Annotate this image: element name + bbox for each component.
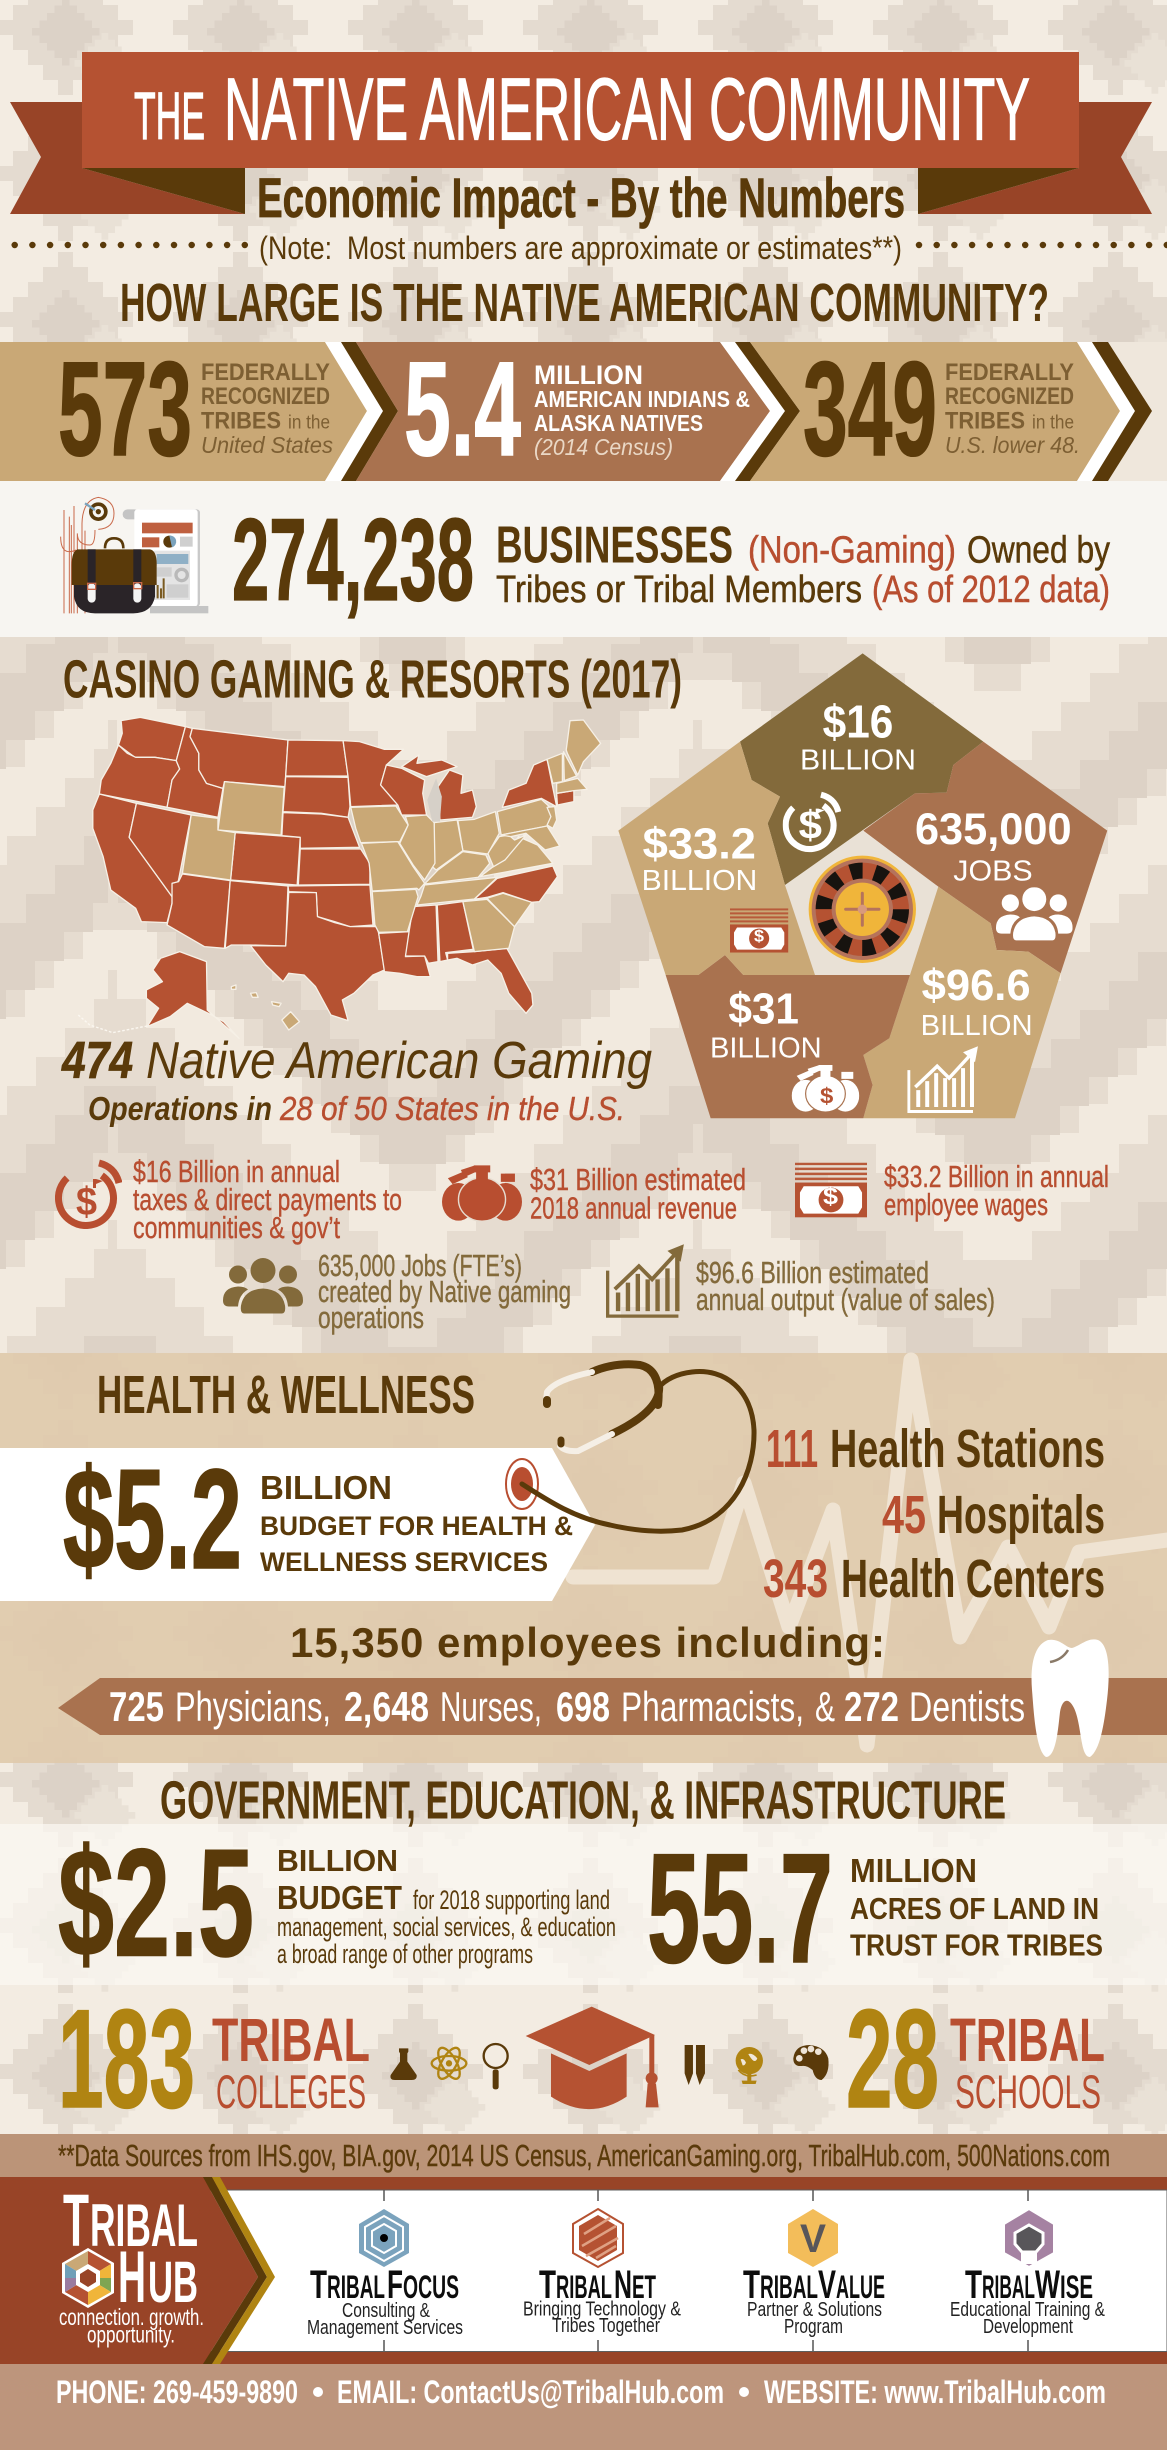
- stat: 55.7 million acres: 55.7: [647, 1822, 833, 1996]
- stat list: health facilities: 111: [766, 1419, 818, 1479]
- stat: 349 tribes: in the: [1032, 413, 1074, 434]
- legend: $96.6 billion: [606, 1244, 995, 1318]
- stat: 5.4 million: (2014 Census): [534, 434, 673, 460]
- icon: blue hexagon: [359, 2209, 409, 2267]
- stat: 55.7 million acres: MILLION: [850, 1852, 977, 1889]
- legend: $31 billion: $31 Billion estimated: [530, 1162, 746, 1197]
- legend: $16 billion: $16 Billion in annual: [133, 1154, 340, 1189]
- stat: 573 tribes: United States: [201, 432, 333, 458]
- stat: businesses: BUSINESSES: [496, 516, 733, 574]
- stat: 5.4 million: [404, 335, 750, 484]
- product: TribalValue: RIBAL: [760, 2269, 818, 2305]
- stat: 573 tribes: TRIBES: [201, 408, 281, 435]
- stat: 183 tribal colleges: COLLEGES: [216, 2065, 366, 2118]
- icon: purple bulb hexagon: [1004, 2209, 1054, 2267]
- legend: 635,000 jobs: created by Native gaming: [318, 1274, 571, 1309]
- legend: $16 billion: communities & gov’t: [133, 1210, 340, 1245]
- stat: 5.4 million: AMERICAN INDIANS &: [534, 386, 750, 412]
- title: THE: [134, 79, 205, 154]
- background: health section: [0, 1353, 1167, 1763]
- product: TribalNet: N: [614, 2263, 632, 2307]
- legend: $33.2 billion: $: [823, 1183, 839, 1210]
- legend: $96.6 billion: annual output (value of sales): [696, 1282, 995, 1317]
- product: TribalNet: Bringing Technology &: [523, 2298, 682, 2320]
- caption: 474 operations: Native American Gaming: [146, 1032, 652, 1090]
- legend: $16 billion: $: [76, 1180, 97, 1224]
- icon: magnifier: [484, 2044, 508, 2089]
- stat: 5.4 million: MILLION: [534, 360, 643, 390]
- stat: 573 tribes: FEDERALLY: [201, 359, 330, 386]
- stat: $2.5 billion budget: BILLION: [277, 1843, 398, 1878]
- panel: health budget: WELLNESS SERVICES: [260, 1547, 548, 1577]
- legend: 635,000 jobs: [223, 1248, 571, 1335]
- logo: Tribal Hub: RIBAL: [90, 2192, 198, 2259]
- icon: red hexagon: [573, 2209, 623, 2267]
- stat: 349 tribes: FEDERALLY: [945, 359, 1074, 386]
- stat: businesses: Owned by: [967, 530, 1110, 572]
- legend: $31 billion: [442, 1162, 746, 1226]
- stat: 55.7 million acres: TRUST FOR TRIBES: [850, 1928, 1103, 1962]
- product: TribalValue: Partner & Solutions: [747, 2299, 882, 2321]
- stat: 5.4 million: 5.4: [404, 335, 521, 484]
- panel: health budget: BILLION: [260, 1469, 392, 1506]
- caption: 474 operations: 474: [61, 1032, 133, 1090]
- arrow band: staff counts: Pharmacists,: [621, 1683, 804, 1730]
- arrow band: staff counts: Dentists: [909, 1683, 1025, 1730]
- product: TribalValue: T: [743, 2263, 760, 2307]
- product: TribalWise: W: [1035, 2263, 1060, 2307]
- panel: health budget: [0, 1440, 595, 1601]
- icon: multicolour hexagon: [62, 2248, 114, 2308]
- stat: 573 tribes: RECOGNIZED: [201, 383, 330, 410]
- product: TribalFocus: OCUS: [403, 2269, 459, 2305]
- stat: 183 tribal colleges: 183: [58, 1980, 195, 2137]
- stat: $96.6 billion: [907, 962, 1033, 1113]
- product: TribalWise: Educational Training &: [950, 2299, 1106, 2321]
- stat: 55.7 million acres: [647, 1822, 1103, 1996]
- icon: stethoscope: [506, 1364, 754, 1531]
- arrow band: staff counts: &: [815, 1683, 835, 1730]
- caption: 474 operations: [61, 1032, 652, 1127]
- stat: 55.7 million acres: ACRES OF LAND IN: [850, 1891, 1099, 1926]
- icon: tooth: [1032, 1639, 1109, 1757]
- stat: businesses: [232, 494, 1110, 625]
- stat: 28 tribal schools: [846, 1980, 1105, 2137]
- stat list: health facilities: 343: [763, 1549, 828, 1609]
- stat: $31 billion: $: [820, 1083, 833, 1108]
- footer: contact details: PHONE: 269-459-9890: [56, 2374, 298, 2410]
- caption: 474 operations: 28 of 50 States in the U.S.: [279, 1090, 625, 1127]
- stat: $31 billion: BILLION: [710, 1032, 822, 1064]
- stat: $2.5 billion budget: for 2018 supporting land: [413, 1885, 610, 1915]
- legend: $33.2 billion: employee wages: [884, 1187, 1048, 1222]
- product: TribalFocus: T: [310, 2263, 327, 2307]
- product: TribalValue: V: [818, 2263, 836, 2307]
- stat: businesses: Tribes or Tribal Members: [496, 569, 862, 611]
- arrow band: staff counts: 725: [109, 1683, 164, 1730]
- stat: businesses: (Non-Gaming): [748, 530, 956, 572]
- stat: 573 tribes: 573: [58, 335, 192, 484]
- stat: 28 tribal schools: 28: [846, 1980, 939, 2137]
- arrow band: staff counts: 698: [556, 1683, 610, 1730]
- stat: businesses: 274,238: [232, 494, 474, 625]
- note with dotted rules: (Note: Most numbers are approximate or estimates**): [259, 230, 902, 266]
- stat: $33.2 billion: [642, 820, 788, 953]
- map: United States: [78, 717, 601, 1038]
- icon: pencils: [685, 2045, 705, 2085]
- product: TribalFocus: Consulting &: [342, 2300, 431, 2322]
- icon: briefcase and report: [61, 497, 208, 613]
- heading: health and wellness: HEALTH & WELLNESS: [97, 1365, 475, 1425]
- stat: $33.2 billion: $33.2: [643, 820, 756, 868]
- stat: $2.5 billion budget: [58, 1818, 616, 1988]
- stat: 349 tribes: TRIBES: [945, 408, 1025, 435]
- product: TribalNet: T: [539, 2263, 556, 2307]
- stat: 183 tribal colleges: TRIBAL: [212, 2006, 370, 2074]
- legend: $96.6 billion: $96.6 Billion estimated: [696, 1255, 929, 1290]
- graphic: ECG line: [573, 1360, 1167, 1745]
- footer: contact details: EMAIL: ContactUs@TribalHub.com: [337, 2374, 724, 2410]
- ribbon banner: [10, 52, 1152, 214]
- logo: Tribal Hub: H: [118, 2237, 146, 2318]
- legend: $16 billion: [48, 1154, 402, 1245]
- stat: $31 billion: [710, 985, 859, 1112]
- icon: roulette wheel: [809, 856, 916, 963]
- background: casino section pattern: [0, 637, 1167, 1353]
- stat: $16 billion: $: [799, 803, 822, 847]
- stat: $2.5 billion budget: management, social services, & education: [277, 1912, 616, 1942]
- background: government section: [0, 1763, 1167, 2134]
- stat: 349 tribes: RECOGNIZED: [945, 383, 1074, 410]
- icon: atom: [432, 2045, 466, 2082]
- icon: palette: [793, 2045, 829, 2080]
- stat: $2.5 billion budget: $2.5: [58, 1818, 254, 1988]
- stat: $2.5 billion budget: a broad range of other programs: [277, 1939, 533, 1969]
- product: TribalWise: RIBAL: [982, 2269, 1035, 2305]
- stat: 28 tribal schools: TRIBAL: [950, 2006, 1105, 2074]
- stat: 349 tribes: U.S. lower 48.: [945, 432, 1080, 458]
- panel: health budget: $5.2: [63, 1440, 242, 1599]
- product: TribalNet: RIBAL: [556, 2269, 612, 2305]
- footer: contact details: [0, 2364, 1167, 2450]
- product: TribalValue: Program: [784, 2316, 843, 2338]
- product: TribalNet: Tribes Together: [552, 2315, 660, 2337]
- product: TribalNet: ET: [632, 2269, 656, 2305]
- product: TribalNet: [523, 2209, 682, 2337]
- caption: 474 operations: Operations in: [88, 1090, 272, 1127]
- panel: pentagon of gaming stats: [618, 653, 1107, 1118]
- legend: 635,000 jobs: operations: [318, 1300, 424, 1335]
- product: TribalWise: [950, 2209, 1106, 2338]
- logo: Tribal Hub: connection. growth.: [59, 2304, 204, 2330]
- icon: flask: [390, 2048, 417, 2080]
- product: TribalFocus: [307, 2209, 463, 2339]
- legend: $31 billion: 2018 annual revenue: [530, 1190, 737, 1226]
- product: TribalValue: [743, 2209, 885, 2338]
- logo: Tribal Hub: [59, 2179, 204, 2348]
- arrow band: staff counts: [58, 1678, 1167, 1735]
- stat list: health facilities: 45: [882, 1485, 926, 1545]
- stat: $33.2 billion: $: [754, 927, 765, 946]
- product: TribalWise: Development: [983, 2316, 1073, 2338]
- logo: Tribal Hub: T: [63, 2179, 89, 2262]
- stat: $96.6 billion: $96.6: [922, 962, 1031, 1010]
- stat: $96.6 billion: BILLION: [921, 1010, 1033, 1042]
- icon: graduation cap: [526, 2007, 659, 2109]
- legend: 635,000 jobs: 635,000 Jobs (FTE’s): [318, 1248, 522, 1283]
- stat: 635,000 jobs: 635,000: [915, 805, 1072, 854]
- logo: Tribal Hub: opportunity.: [87, 2322, 175, 2348]
- icon: gold hexagon: [788, 2209, 838, 2267]
- arrow band: staff counts: Nurses,: [440, 1683, 542, 1730]
- stat: $31 billion: $31: [728, 985, 799, 1033]
- stat: $2.5 billion budget: BUDGET: [277, 1879, 402, 1916]
- arrow band: staff counts: Physicians,: [175, 1683, 331, 1730]
- stat: $16 billion: BILLION: [800, 744, 916, 776]
- heading: casino gaming: CASINO GAMING & RESORTS (2017): [63, 650, 682, 710]
- icon: globe: [736, 2047, 763, 2084]
- stat list: health facilities: [763, 1419, 1105, 1609]
- panel: health budget: BUDGET FOR HEALTH &: [260, 1511, 573, 1541]
- text: employees: 15,350 employees including:: [290, 1619, 885, 1666]
- product: TribalWise: T: [965, 2263, 982, 2307]
- product: TribalFocus: F: [387, 2263, 403, 2307]
- stat: 5.4 million: ALASKA NATIVES: [534, 410, 703, 436]
- panel: company strip: [0, 2177, 1167, 2364]
- product: TribalValue: ALUE: [836, 2269, 885, 2305]
- product: TribalWise: ISE: [1060, 2269, 1093, 2305]
- stat: 573 tribes: in the: [288, 413, 330, 434]
- legend: $16 billion: taxes & direct payments to: [133, 1182, 402, 1217]
- background: woven pattern top: [0, 0, 1167, 342]
- icon: gold hexagon: V: [800, 2217, 826, 2261]
- arrow band: staff counts: 2,648: [344, 1683, 429, 1730]
- product: TribalFocus: Management Services: [307, 2317, 463, 2339]
- product: TribalFocus: RIBAL: [327, 2269, 385, 2305]
- logo: Tribal Hub: UB: [148, 2250, 198, 2315]
- stat: 635,000 jobs: JOBS: [953, 856, 1033, 888]
- panel: businesses: [0, 481, 1167, 637]
- icons: education: [390, 2007, 829, 2109]
- stat: 635,000 jobs: [915, 805, 1073, 940]
- stat: $33.2 billion: BILLION: [642, 865, 757, 897]
- stat: businesses: (As of 2012 data): [872, 569, 1110, 611]
- stat: 349 tribes: 349: [803, 335, 937, 484]
- stat: $16 billion: [776, 695, 916, 858]
- chevron band: [0, 342, 1152, 481]
- legend: $33.2 billion: [795, 1159, 1109, 1222]
- arrow band: staff counts: 272: [844, 1683, 899, 1730]
- stat: $16 billion: $16: [823, 695, 893, 747]
